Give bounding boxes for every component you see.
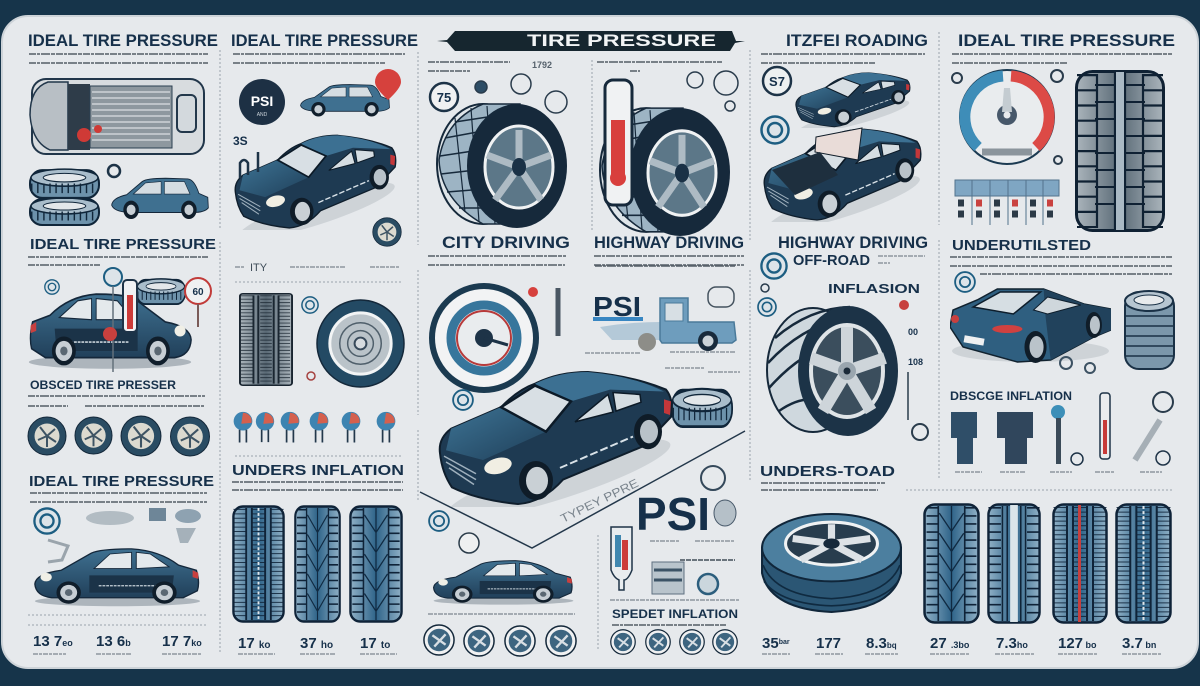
value: 17 ko [238, 635, 271, 652]
icon: small badges [687, 71, 738, 111]
description text block [597, 62, 722, 71]
heading: IDEAL TIRE PRESSURE [30, 236, 216, 253]
icon: tire badge [762, 116, 788, 144]
icon: air hose [240, 152, 258, 178]
caption text [585, 352, 740, 372]
sedan small [796, 73, 912, 139]
heading: off-road: OFF-ROAD [793, 252, 870, 269]
small icons [758, 284, 909, 316]
sedan with open hood [764, 128, 924, 240]
panel: off-road and inflation [758, 31, 928, 440]
small caption: 1792 [532, 60, 552, 70]
icon: small badge [108, 165, 120, 177]
icon: swirl [701, 466, 725, 490]
icon: red badge [528, 287, 538, 297]
description text block [428, 256, 566, 265]
icon: red pin [307, 372, 315, 380]
panel: ideal tire pressure row two left [28, 236, 216, 456]
title banner [437, 31, 745, 51]
icon: thermometer [605, 80, 632, 205]
icon: small gauge connector [453, 390, 473, 410]
heading: OBSCED TIRE PRESSER [30, 378, 176, 392]
value: bar [779, 639, 790, 646]
car side view [112, 178, 208, 219]
value: 17 to [360, 635, 390, 652]
floor outline [420, 431, 745, 548]
heading: highway driving: HIGHWAY DRIVING [778, 233, 928, 252]
icon: PSI badge [239, 79, 285, 125]
value: 7.3ho [996, 635, 1028, 652]
caption labels [762, 653, 1162, 655]
value: 35 [762, 635, 779, 652]
stacked tire [1125, 291, 1174, 369]
heading: IDEAL TIRE PRESSURE [29, 473, 214, 490]
caption labels [238, 653, 397, 655]
panel: top right gauge and tread [950, 31, 1175, 472]
pressure gauge [432, 286, 536, 390]
large tire [600, 108, 730, 236]
value: 127 bo [1058, 635, 1097, 652]
description text block [950, 257, 1172, 274]
value: 177 [816, 635, 841, 652]
description text block [612, 624, 726, 626]
caption text [235, 266, 400, 268]
icon: dial [459, 533, 479, 553]
heading: inflation: DBSCGE INFLATION [950, 389, 1072, 403]
icon: 75 badge: 75 [437, 90, 451, 105]
stacked tire [137, 279, 185, 304]
small car [434, 561, 573, 605]
tread samples [233, 506, 402, 622]
title banner: TIRE PRESSURE [527, 31, 716, 50]
description text block [595, 265, 735, 267]
car side view [301, 85, 389, 116]
icon: S7 badge [763, 67, 791, 95]
panel: bottom left car [29, 473, 214, 654]
panel: bottom centre [424, 466, 740, 656]
tread sample [1076, 72, 1164, 230]
panel: highway driving [594, 62, 744, 265]
icon: small badges [475, 74, 567, 113]
panel: under-road bottom right [760, 463, 1170, 654]
heading: spedet inflation: SPEDET INFLATION [612, 607, 738, 621]
icon: 75 badge [430, 83, 458, 111]
tread sample [240, 294, 292, 385]
small parts [1060, 357, 1095, 373]
icon: PSI badge: AND [257, 112, 268, 118]
value: 13 6b [96, 633, 131, 650]
panel: PSI truck [585, 266, 740, 372]
small wheels [424, 625, 737, 656]
description text block [233, 54, 405, 63]
description text block [30, 493, 207, 502]
car side view [35, 549, 200, 606]
icon: thermometer [123, 280, 137, 332]
large alloy tire [767, 306, 898, 436]
large tire [437, 104, 567, 228]
icon: dial: 60 [192, 287, 204, 298]
description text block [594, 256, 744, 265]
icon: round badge [761, 253, 787, 279]
value: 3.7 bn [1122, 635, 1156, 652]
heading: CITY DRIVING [442, 233, 570, 252]
icon: dial [185, 278, 211, 327]
icon: disc [714, 500, 736, 526]
caption text [650, 540, 735, 542]
caption labels [955, 471, 1162, 473]
large PSI label: PSI [636, 488, 710, 540]
icon: stacked tires [30, 169, 99, 225]
value: 8.3bq [866, 635, 897, 652]
description text block [428, 62, 510, 71]
panel: gauge and sedan centre [420, 286, 745, 548]
heading fragment: ITY [250, 262, 268, 274]
description text block [952, 54, 1172, 63]
flat tire [762, 514, 901, 612]
caption text [610, 599, 740, 601]
engine parts [652, 560, 735, 594]
icon: recycling badge [429, 511, 449, 531]
heading: roading: ITZFEI ROADING [786, 31, 928, 50]
chassis illustration [30, 79, 204, 154]
tread samples [925, 505, 1170, 622]
description text block [28, 396, 205, 406]
heading: UNDERS-TOAD [760, 463, 895, 480]
value: 37 ho [300, 635, 333, 652]
panel: tread and wheel [234, 262, 404, 442]
wheels row [28, 416, 209, 456]
heading: HIGHWAY DRIVING [594, 233, 744, 252]
icon: small badges [45, 280, 59, 294]
car facing right [29, 294, 191, 369]
icon: tire valve [556, 288, 560, 336]
icon: small wheel [373, 218, 401, 246]
heading: IDEAL TIRE PRESSURE [231, 31, 418, 50]
side spec column: 108 [908, 357, 923, 367]
pins row [234, 412, 395, 442]
spare tire [672, 389, 732, 427]
description text block [761, 54, 925, 63]
value: 27 .3bo [930, 635, 970, 652]
icon: badge [955, 272, 975, 292]
panel: ideal tire pressure second column [231, 31, 418, 249]
value: 13 7eo [33, 633, 73, 650]
pressure gauge [960, 70, 1054, 164]
car rear view [950, 289, 1111, 363]
icon: S7 badge: S7 [769, 74, 785, 89]
large sedan [440, 372, 676, 534]
heading: IDEAL TIRE PRESSURE [28, 31, 218, 50]
icon: PSI badge: PSI [251, 93, 273, 109]
red stripe on tread [1078, 505, 1081, 622]
panel: under inflation [232, 462, 404, 654]
side spec column: 00 [908, 327, 918, 337]
figures and tools [951, 392, 1173, 465]
PSI label: PSI [593, 291, 641, 322]
description text block [761, 483, 885, 490]
panel: city driving [428, 60, 570, 265]
icons row [34, 508, 201, 562]
large sedan [235, 135, 399, 249]
icon: red location pin [375, 69, 401, 100]
value: 17 7ko [162, 633, 202, 650]
panel: ideal tire pressure top left [28, 31, 218, 225]
icon: thermometer [611, 527, 632, 590]
heading: underutilsted: UNDERUTILSTED [952, 237, 1091, 254]
description text block [29, 54, 208, 63]
side spec column [908, 327, 928, 440]
description text block [878, 256, 925, 263]
icon: pressure pin [103, 268, 122, 372]
caption text [428, 613, 575, 615]
description text block [232, 482, 403, 490]
heading: UNDERS INFLATION [232, 462, 404, 479]
icon: badge [302, 297, 318, 313]
floor caption: TYPEY PPRE [558, 476, 641, 526]
heading: inflation: INFLASION [828, 281, 920, 296]
pressure table [955, 180, 1059, 225]
caption labels [33, 653, 202, 655]
value label: 3S [233, 134, 248, 148]
wheel [317, 300, 404, 387]
icon: tag [708, 287, 734, 307]
heading: IDEAL TIRE PRESSURE [958, 31, 1175, 50]
icon: small badges [952, 70, 1063, 164]
pickup truck [600, 298, 736, 351]
description text block [28, 257, 208, 265]
